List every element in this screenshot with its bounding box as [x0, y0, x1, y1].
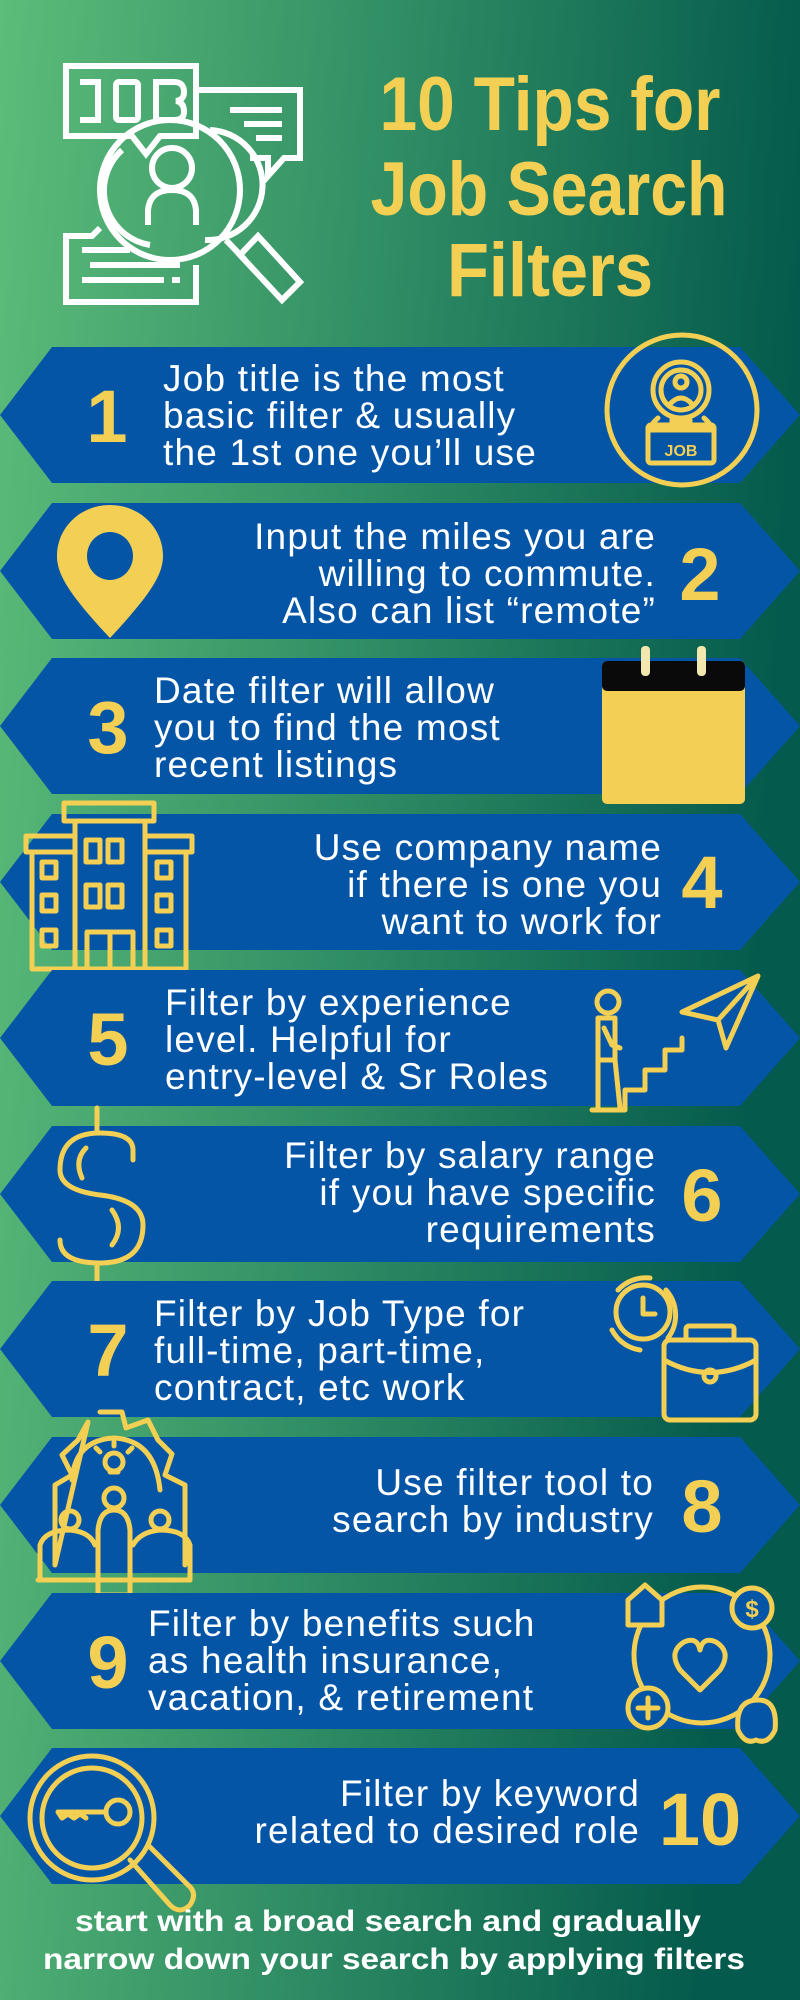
- panel: tip 6: requirements: [426, 1209, 656, 1250]
- panel: tip 5: Filter by experience: [165, 982, 512, 1023]
- title: Job Search: [370, 147, 728, 232]
- panel: tip 5: 5: [87, 998, 129, 1081]
- panel: tip 5: [0, 970, 800, 1110]
- panel: tip 6: Filter by salary range: [284, 1135, 656, 1176]
- panel: tip 7: full-time, part-time,: [154, 1330, 486, 1371]
- panel: tip 2: Input the miles you are: [254, 516, 656, 557]
- panel: tip 2: Also can list “remote”: [282, 590, 656, 631]
- panel: tip 3: 3: [87, 686, 129, 769]
- title: Filters: [447, 228, 653, 313]
- panel: tip 9: Filter by benefits such: [148, 1603, 535, 1644]
- panel: tip 10: Filter by keyword: [340, 1773, 640, 1814]
- panel: tip 7: 7: [87, 1309, 129, 1392]
- panel: tip 1: basic filter & usually: [163, 395, 516, 436]
- panel: tip 5: entry-level & Sr Roles: [165, 1056, 549, 1097]
- panel: tip 4: 4: [681, 841, 723, 924]
- panel: tip 7: contract, etc work: [154, 1367, 466, 1408]
- panel: tip 1: JOB: [665, 443, 697, 460]
- panel: tip 4: want to work for: [381, 901, 662, 942]
- panel: tip 8: [0, 1412, 800, 1595]
- panel: tip 3: [0, 646, 800, 804]
- panel: tip 1: 1: [86, 375, 128, 458]
- panel: tip 9: vacation, & retirement: [148, 1677, 534, 1718]
- title: 10 Tips for: [380, 62, 720, 147]
- panel: tip 9: 9: [87, 1621, 129, 1704]
- panel: tip 9: as health insurance,: [148, 1640, 503, 1681]
- footer message: [43, 1905, 745, 1976]
- panel: tip 3: Date filter will allow: [154, 670, 495, 711]
- panel: tip 4: [0, 803, 800, 969]
- panel: tip 10: related to desired role: [255, 1810, 640, 1851]
- title: [370, 62, 728, 313]
- header icon: job search magnifier: [66, 66, 300, 302]
- panel: tip 5: level. Helpful for: [165, 1019, 452, 1060]
- panel: tip 2: willing to commute.: [318, 553, 656, 594]
- footer message: narrow down your search by applying filters: [43, 1943, 745, 1976]
- panel: tip 10: [0, 1748, 800, 1910]
- panel: tip 6: [0, 1108, 800, 1280]
- panel: tip 1: [0, 335, 800, 485]
- panel: tip 4: if there is one you: [347, 864, 662, 905]
- panel: tip 1: the 1st one you’ll use: [163, 432, 537, 473]
- panel: tip 6: if you have specific: [319, 1172, 656, 1213]
- panel: tip 9: [0, 1585, 800, 1741]
- panel: tip 8: Use filter tool to: [375, 1462, 654, 1503]
- footer message: start with a broad search and gradually: [75, 1905, 701, 1938]
- panel: tip 2: [0, 503, 800, 639]
- panel: tip 3: recent listings: [154, 744, 398, 785]
- panel: tip 8: 8: [681, 1465, 723, 1548]
- panel: tip 7: [0, 1278, 800, 1420]
- panel: tip 3: you to find the most: [154, 707, 501, 748]
- panel: tip 8: search by industry: [332, 1499, 654, 1540]
- panel: tip 7: Filter by Job Type for: [154, 1293, 525, 1334]
- panel: tip 4: Use company name: [314, 827, 662, 868]
- panel: tip 9: $: [745, 1596, 759, 1623]
- panel: tip 1: Job title is the most: [163, 358, 505, 399]
- panel: tip 2: 2: [679, 533, 721, 616]
- panel: tip 10: 10: [659, 1778, 741, 1861]
- panel: tip 6: 6: [681, 1154, 723, 1237]
